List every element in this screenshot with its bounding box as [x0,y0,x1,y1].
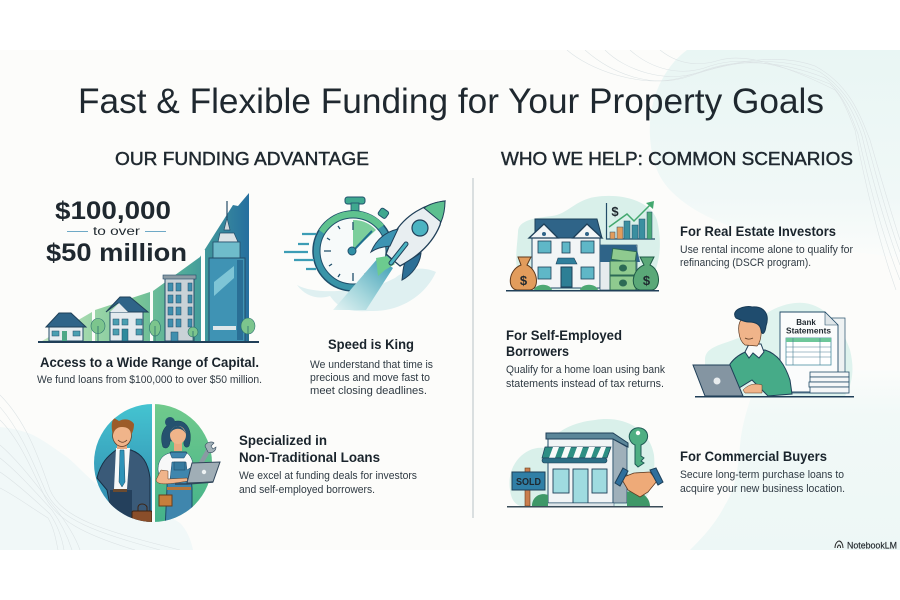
skyscraper [226,201,228,218]
icon: stopwatch and rocket [284,197,445,311]
icon: capital range skyline: to over [93,226,140,238]
desk line [695,396,854,398]
heading: speed is king: Speed is King [328,336,414,352]
wrench [201,449,209,463]
text: real estate description: Use rental income alone to qualify for [680,244,853,256]
businessman [97,418,152,530]
icon: capital range skyline [38,193,259,343]
text: real estate description [680,244,853,269]
icon: storefront, sold sign, key, handshake [507,419,663,508]
icon: rental house and money: $ [643,273,651,288]
cloud base [297,269,436,311]
rising growth area [42,193,249,341]
house [532,238,600,288]
paper stack [809,372,849,393]
key [629,428,648,467]
text: commercial description: acquire your new business location. [680,483,845,495]
ground line [507,506,663,508]
statement table [786,338,831,365]
stopwatch [345,197,365,204]
heading: self-employed borrowers: For Self-Employed [506,327,622,343]
icon: capital range skyline: $50 million [46,239,187,267]
speed lines [284,234,316,269]
bar chart with arrow [606,203,655,239]
divider [472,178,474,518]
NotebookLM badge: NotebookLM [847,540,897,552]
bushes [532,491,650,506]
text: speed description: precious and move fast to [310,372,430,384]
rocket flame trail [333,258,393,310]
icon: rental house and money [506,196,660,292]
title: Fast & Flexible Funding for Your Property Goals [78,82,824,121]
text: capital description: We fund loans from $100,000 to over $50 million. [37,374,262,386]
icon: person with laptop and bank statements: Statements [786,326,832,336]
heading: real estate investors: For Real Estate Investors [680,223,836,239]
text: non-traditional description: and self-employed borrowers. [239,484,375,496]
icon: storefront, sold sign, key, handshake: SOLD [516,477,541,488]
apartment building [165,278,194,341]
text: speed description: We understand that time is [310,359,433,371]
medium house [110,312,143,341]
text: speed description [310,359,433,397]
text: non-traditional description: We excel at funding deals for investors [239,470,417,482]
small house [49,327,83,341]
heading: access to capital: Access to a Wide Range of Capital. [40,354,259,370]
icon: investor and self-employed circle [94,404,221,522]
text: speed description: meet closing deadlines. [310,385,427,397]
money bag green [633,257,659,290]
ground line [506,290,659,292]
text: commercial description [680,469,845,495]
laptop [693,365,743,396]
handshake [621,472,657,497]
person [726,350,792,396]
heading: our funding advantage: OUR FUNDING ADVANTAGE [115,148,369,169]
text: real estate description: refinancing (DSCR program). [680,257,811,269]
amount text: $100,000 [55,197,171,225]
sold sign [525,468,530,506]
woman overalls [156,417,193,530]
laptop [187,462,220,483]
heading: self-employed borrowers: Borrowers [506,343,569,359]
statement pages [792,318,845,393]
heading: who we help: WHO WE HELP: COMMON SCENARIOS [501,148,853,169]
text: self-employed description: statements instead of tax returns. [506,378,664,390]
text: commercial description: Secure long-term purchase loans to [680,469,844,481]
text: non-traditional description [239,470,417,496]
ground line [38,341,259,343]
store [548,439,613,503]
rocket [386,201,445,266]
heading: self-employed borrowers [506,327,622,359]
text: self-employed description: Qualify for a home loan using bank [506,364,665,376]
icon: rental house and money: $ [520,273,528,288]
icon: rental house and money: $ [611,204,619,219]
icon: person with laptop and bank statements: Bank [796,318,816,327]
trees [91,318,255,337]
money bag orange [510,257,536,290]
tool pouch [159,495,172,506]
text: self-employed description [506,364,665,390]
cash stacks [610,248,637,290]
icon: person with laptop and bank statements [693,303,854,398]
awning [542,447,611,458]
heading: commercial buyers: For Commercial Buyers [680,448,827,464]
heading: non-traditional loans: Non-Traditional Loans [239,449,380,465]
heading: non-traditional loans [239,432,380,465]
heading: non-traditional loans: Specialized in [239,432,327,448]
